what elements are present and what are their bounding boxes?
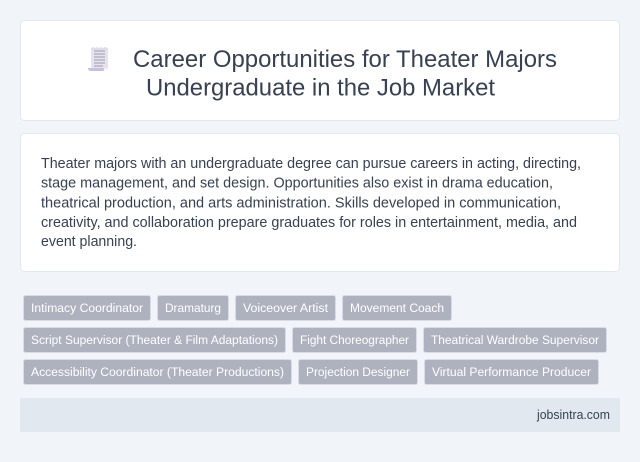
tag: Movement Coach bbox=[350, 301, 444, 315]
tag: Voiceover Artist bbox=[243, 301, 329, 315]
tag bbox=[24, 360, 292, 384]
tag: Projection Designer bbox=[306, 365, 410, 379]
tag bbox=[24, 296, 150, 320]
tag: Fight Choreographer bbox=[300, 333, 409, 347]
description text: stage management, and set design. Opportunities also exist in drama education, bbox=[41, 176, 553, 192]
tag: Accessibility Coordinator (Theater Productions) bbox=[31, 365, 284, 379]
tag bbox=[24, 328, 286, 352]
tag: Script Supervisor (Theater & Film Adaptations) bbox=[31, 333, 278, 347]
tag: Virtual Performance Producer bbox=[432, 365, 591, 379]
description text: event planning. bbox=[41, 234, 137, 250]
tag bbox=[298, 360, 418, 384]
tag bbox=[342, 296, 452, 320]
panel: title card bbox=[20, 20, 620, 120]
tags bbox=[24, 296, 606, 384]
tag bbox=[292, 328, 416, 352]
tag bbox=[424, 328, 606, 352]
description text: theatrical production, and arts administration. Skills developed in communication, bbox=[41, 196, 561, 212]
description text bbox=[41, 156, 581, 250]
tag bbox=[158, 296, 228, 320]
tag: Theatrical Wardrobe Supervisor bbox=[431, 333, 599, 347]
title bbox=[133, 46, 557, 102]
icon: document scroll bbox=[88, 47, 108, 71]
footer source text: jobsintra.com bbox=[536, 408, 610, 422]
panel: description bbox=[20, 134, 620, 272]
tag: Dramaturg bbox=[165, 301, 221, 315]
description text: Theater majors with an undergraduate degree can pursue careers in acting, directing, bbox=[41, 156, 581, 172]
tag: Intimacy Coordinator bbox=[31, 301, 143, 315]
title: Undergraduate in the Job Market bbox=[146, 74, 495, 102]
tag bbox=[236, 296, 336, 320]
description text: creativity, and collaboration prepare graduates for roles in entertainment, media, and bbox=[41, 215, 577, 231]
tag bbox=[424, 360, 598, 384]
footer bbox=[20, 398, 620, 432]
title: Career Opportunities for Theater Majors bbox=[133, 46, 557, 73]
